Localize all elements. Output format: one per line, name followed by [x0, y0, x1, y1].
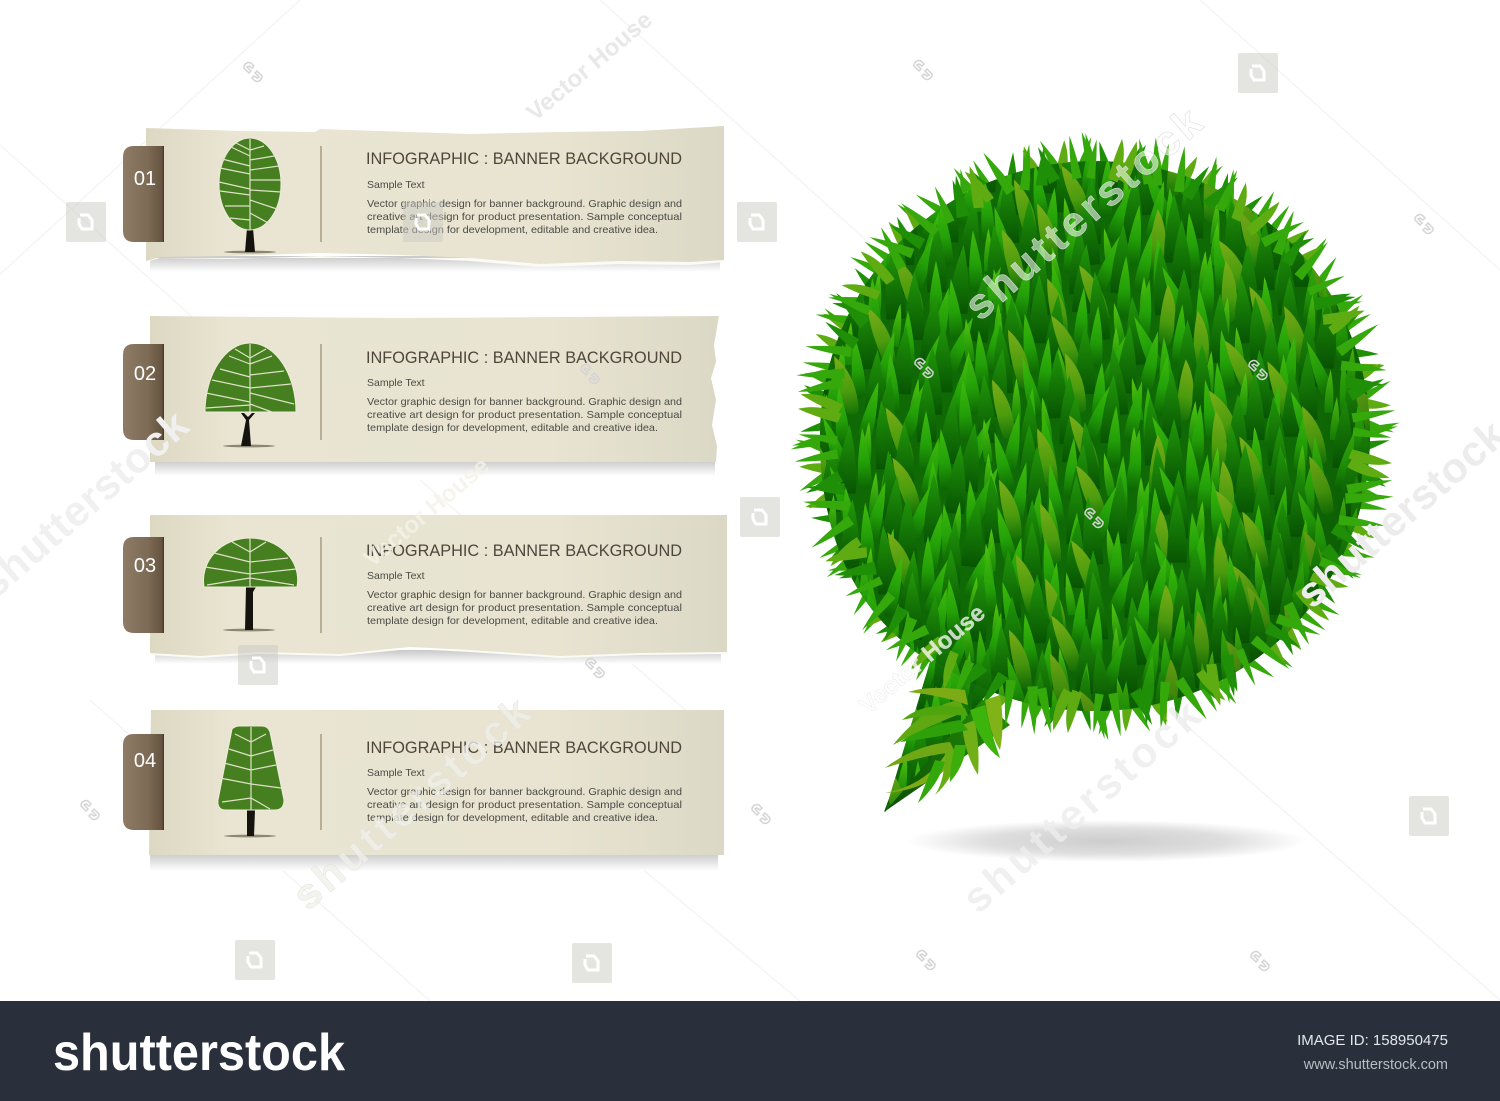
banner 3: [123, 515, 727, 664]
Vector House watermarks: Vector House: [855, 599, 991, 720]
banner 2 text: template design for development, editable and creative idea.: [367, 422, 658, 434]
banner 4 paper: [149, 710, 724, 855]
footer logo: shutterstock: [53, 1024, 345, 1082]
banner 2: [123, 316, 719, 476]
banner 4 number tab: [123, 734, 164, 830]
banner 2 shadow: [155, 460, 715, 476]
banner 1 text: creative art design for product presentation. Sample conceptual: [367, 211, 682, 223]
banner 1: [123, 126, 724, 272]
banner 3 torn white edge: [150, 649, 727, 658]
banner 1 text: template design for development, editable and creative idea.: [367, 224, 658, 236]
banner 4 tree icon: [218, 726, 284, 837]
banner 2 text: [366, 348, 682, 434]
banner 2 divider: [320, 344, 322, 440]
banner 1 text: Vector graphic design for banner background. Graphic design and: [367, 198, 682, 210]
banner 2 number tab: 02: [134, 363, 156, 385]
banner 1 text: Sample Text: [367, 179, 425, 191]
banner 4 divider: [320, 734, 322, 830]
banner 1 shadow: [150, 256, 720, 272]
banner 1 number tab: [123, 146, 164, 242]
banner 1 text: INFOGRAPHIC : BANNER BACKGROUND: [366, 149, 682, 168]
banner 1 text: [366, 149, 682, 236]
banner 3 tree icon: [204, 538, 298, 631]
banner 3 text: Sample Text: [367, 570, 425, 582]
footer image id: IMAGE ID: 158950475: [1297, 1032, 1448, 1049]
banner 3 text: creative art design for product presentation. Sample conceptual: [367, 602, 682, 614]
bubble ground shadow: [907, 820, 1307, 862]
banner 3 text: template design for development, editable and creative idea.: [367, 615, 658, 627]
shutterstock watermark lower right: shutterstock: [953, 690, 1209, 922]
grass speech bubble: [790, 132, 1400, 812]
banner 3 text: Vector graphic design for banner background. Graphic design and: [367, 589, 682, 601]
banner 1 number tab: 01: [134, 168, 156, 190]
small link watermark marks: [81, 61, 1433, 970]
banner 4 text: [366, 738, 682, 824]
banner 3 shadow: [155, 650, 721, 664]
banner 4 shadow: [150, 853, 718, 871]
banner 2 paper: [150, 316, 719, 462]
banner 3 paper: [150, 515, 727, 656]
grass blade fill: [820, 161, 1370, 812]
banner 1 paper: [146, 126, 724, 264]
banner 1 tree icon: [219, 138, 281, 253]
square watermark marks: [66, 53, 1449, 983]
shutterstock watermark on banner 4: shutterstock: [283, 687, 539, 919]
grass edge spikes back layer: [668, 9, 1500, 863]
banner 3 text: [366, 541, 682, 627]
footer bar: [0, 1001, 1500, 1101]
banner 2 text: INFOGRAPHIC : BANNER BACKGROUND: [366, 348, 682, 367]
banner 1 divider: [320, 146, 322, 242]
grass edge spikes front layer: [668, 9, 1500, 863]
banner 4 number tab: 04: [134, 750, 156, 772]
banner 4 text: INFOGRAPHIC : BANNER BACKGROUND: [366, 738, 682, 757]
banner 3 number tab: 03: [134, 555, 156, 577]
Vector House watermarks: Vector House: [359, 452, 495, 573]
banner 4 text: Vector graphic design for banner background. Graphic design and: [367, 786, 682, 798]
speech bubble tail base: [884, 660, 1010, 812]
speech bubble tail blades: [885, 688, 1002, 803]
banner 4 text: template design for development, editable and creative idea.: [367, 812, 658, 824]
banner 3 number tab: [123, 537, 164, 633]
banner 4 text: creative art design for product presentation. Sample conceptual: [367, 799, 682, 811]
Vector House watermarks: [359, 6, 991, 720]
banner 2 tree icon: [205, 343, 296, 447]
banner 4: [123, 710, 724, 871]
banner 3 text: INFOGRAPHIC : BANNER BACKGROUND: [366, 541, 682, 560]
banner 1 torn white edge: [146, 256, 724, 267]
shutterstock watermark on grass: shutterstock: [955, 97, 1211, 329]
banner 3 divider: [320, 537, 322, 633]
banner 2 text: Vector graphic design for banner background. Graphic design and: [367, 396, 682, 408]
banner 4 text: Sample Text: [367, 767, 425, 779]
banner 2 text: Sample Text: [367, 377, 425, 389]
banner 2 text: creative art design for product presentation. Sample conceptual: [367, 409, 682, 421]
footer website: www.shutterstock.com: [1303, 1057, 1448, 1073]
Vector House watermarks: Vector House: [522, 6, 658, 127]
banner 2 number tab: [123, 344, 164, 440]
